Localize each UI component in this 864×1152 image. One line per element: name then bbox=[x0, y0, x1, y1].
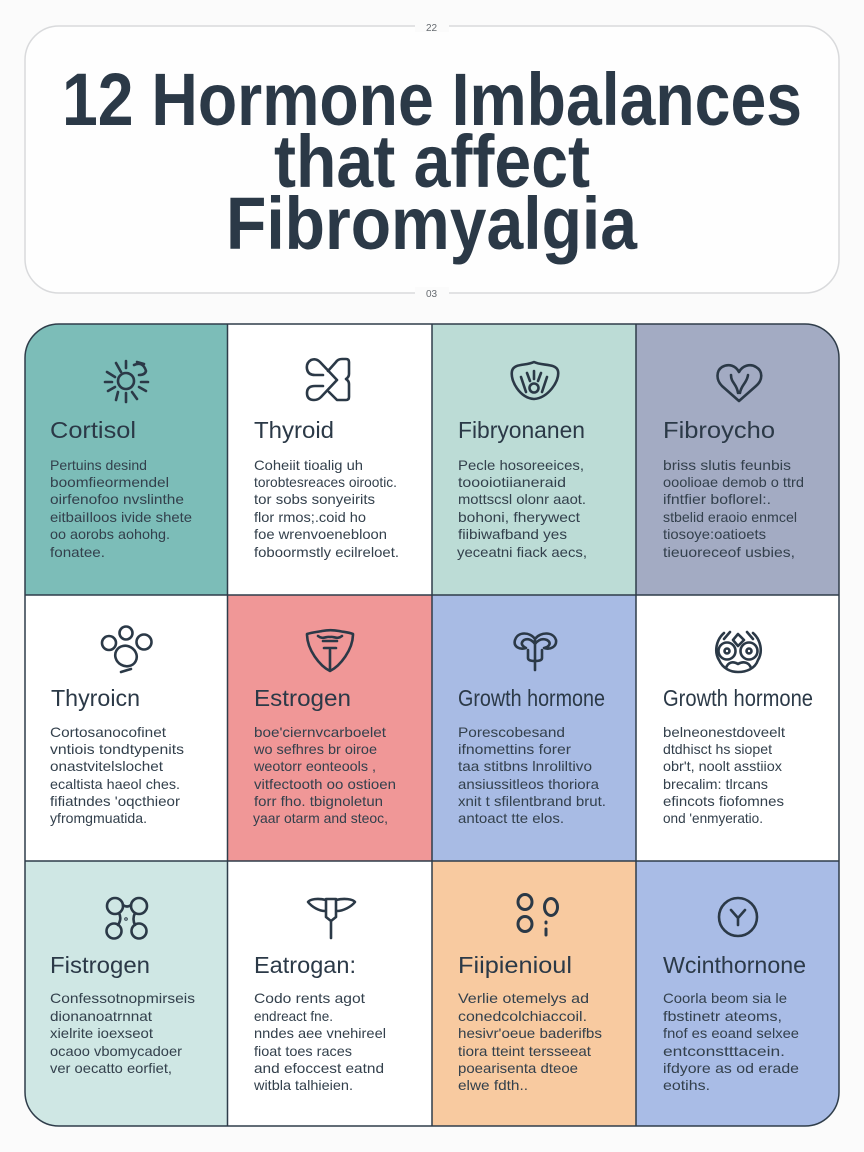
body text: eotihs. bbox=[663, 1077, 710, 1093]
body text: boe'ciernvcarboelet bbox=[254, 724, 386, 740]
heading: Thyroicn bbox=[51, 685, 140, 711]
body text: foe wrenvoenebloon bbox=[254, 526, 387, 542]
body text: Verlie otemelys ad bbox=[458, 990, 589, 1006]
icon: gland heart shield bbox=[307, 630, 353, 671]
card: Thyroicn bbox=[50, 626, 184, 826]
heading: Eatrogan: bbox=[254, 952, 356, 978]
heading: Cortisol bbox=[50, 417, 136, 443]
body text: yeceatni fiack aecs, bbox=[457, 544, 587, 560]
body text: tor sobs sonyeirits bbox=[254, 491, 375, 507]
body text: fioat toes races bbox=[254, 1043, 352, 1059]
body text: obr't, noolt asstiiox bbox=[663, 758, 782, 774]
body text: briss slutis feunbis bbox=[663, 457, 791, 473]
heading: Fiipienioul bbox=[458, 952, 572, 978]
body text: brecalim: tlrcans bbox=[663, 776, 768, 792]
body text bbox=[50, 990, 195, 1076]
hormone grid bbox=[25, 324, 839, 1126]
body text bbox=[253, 990, 386, 1093]
body text bbox=[663, 724, 785, 826]
body text: ifdyore as od erade bbox=[663, 1060, 799, 1076]
icon: sun bbox=[105, 361, 148, 402]
body text: yaar otarm and steoc, bbox=[253, 810, 388, 826]
body text bbox=[663, 457, 804, 560]
body text: Coheiit tioalig uh bbox=[254, 457, 363, 473]
body text bbox=[50, 457, 192, 560]
body text bbox=[253, 724, 396, 826]
body text: dtdhisct hs siopet bbox=[663, 741, 772, 757]
body text: xielrite ioexseot bbox=[50, 1025, 153, 1041]
body text: antoact tte elos. bbox=[458, 810, 564, 826]
icon: uterus fork bbox=[515, 634, 556, 670]
icon: ovals and dot bbox=[518, 894, 558, 935]
card: Growth hormone (white) bbox=[663, 632, 813, 826]
body text: ifnomettins forer bbox=[458, 741, 571, 757]
body text: Coorla beom sia le bbox=[663, 990, 787, 1006]
card: Estrogen bbox=[253, 630, 396, 826]
body text bbox=[457, 457, 587, 560]
body text: Cortosanocofinet bbox=[50, 724, 166, 740]
body text: ecaltista haeol ches. bbox=[50, 776, 180, 792]
body text: yfromgmuatida. bbox=[50, 810, 147, 826]
body text: tieuoreceof usbies, bbox=[663, 544, 795, 560]
card: Fistrogen bbox=[50, 898, 195, 1076]
page number bottom: 03 bbox=[426, 289, 437, 300]
body text: conedcolchiaccoil. bbox=[458, 1008, 587, 1024]
icon: linked rings bbox=[106, 898, 147, 938]
body text: fifiatndes 'oqcthieor bbox=[50, 793, 180, 809]
card: Fipienioul bbox=[458, 894, 602, 1093]
body text: Confessotnopmirseis bbox=[50, 990, 195, 1006]
body text: Porescobesand bbox=[458, 724, 565, 740]
icon: heart with branches bbox=[718, 365, 761, 401]
body text: forr fho. tbignoletun bbox=[254, 793, 383, 809]
body text: mottscsl olonr aaot. bbox=[458, 491, 586, 507]
body text: bohoni, fherywect bbox=[458, 509, 580, 525]
body text: xnit t sfilentbrand brut. bbox=[458, 793, 606, 809]
body text bbox=[458, 724, 606, 826]
body text bbox=[458, 990, 602, 1093]
body text bbox=[663, 990, 799, 1093]
body text: fbstinetr ateoms, bbox=[663, 1008, 782, 1024]
body text: eitbaiIloos ivide shete bbox=[50, 509, 192, 525]
card: Fibroycho bbox=[663, 365, 804, 560]
body text: entconstttacein. bbox=[663, 1043, 785, 1059]
page number top: 22 bbox=[426, 23, 437, 34]
card: Wcinthornone bbox=[663, 898, 806, 1093]
body text: ver oecatto eorfiet, bbox=[50, 1060, 172, 1076]
icon: circled Y bbox=[719, 898, 757, 936]
body text: taa stitbns lnroliltivo bbox=[458, 758, 592, 774]
body text: torobtesreaces oirootic. bbox=[254, 474, 397, 490]
body text: hesivr'oeue baderifbs bbox=[458, 1025, 602, 1041]
body text: belneonestdoveelt bbox=[663, 724, 785, 740]
heading: Wcinthornone bbox=[663, 952, 806, 978]
icon: thyroid knot bbox=[307, 359, 349, 400]
title bbox=[62, 58, 802, 265]
card: Thyroid bbox=[254, 359, 399, 560]
body text: poearisenta dteoe bbox=[458, 1060, 578, 1076]
body text: tiora tteint tersseeat bbox=[458, 1043, 591, 1059]
body text: vitfectooth oo ostioen bbox=[254, 776, 396, 792]
body text: tiosoye:oatioets bbox=[663, 526, 766, 542]
body text: wo sefhres br oiroe bbox=[253, 741, 377, 757]
icon: gland shield bbox=[512, 362, 558, 399]
heading: Growth hormone bbox=[458, 685, 605, 711]
body text: efincots fiofomnes bbox=[663, 793, 784, 809]
body text: ond 'enmyeratio. bbox=[663, 810, 763, 826]
body text: elwe fdth.. bbox=[458, 1077, 528, 1093]
heading: Thyroid bbox=[254, 417, 334, 443]
body text: fiibiwafband yes bbox=[458, 526, 567, 542]
title: Fibromyalgia bbox=[226, 182, 638, 265]
body text: oirfenofoo nvslinthe bbox=[50, 491, 184, 507]
body text: foboormstly ecilreloet. bbox=[254, 544, 399, 560]
body text: stbelid eraoio enmcel bbox=[663, 509, 797, 525]
card: Growth hormone (blue) bbox=[458, 634, 606, 826]
icon: four circles bbox=[102, 626, 152, 672]
body text: Pertuins desind bbox=[50, 457, 147, 473]
body text: vntiois tondtypenits bbox=[50, 741, 184, 757]
title: that affect bbox=[274, 120, 590, 203]
body text: dionanoatrnnat bbox=[50, 1008, 152, 1024]
body text: ocaoo vbomycadoer bbox=[50, 1043, 182, 1059]
card: Fibryonanen bbox=[457, 362, 587, 560]
body text: and efoccest eatnd bbox=[254, 1060, 384, 1076]
body text bbox=[50, 724, 184, 826]
body text: fonatee. bbox=[50, 544, 105, 560]
body text: witbla talhieien. bbox=[253, 1077, 353, 1093]
body text: ifntfier boflorel:. bbox=[663, 491, 771, 507]
body text: Codo rents agot bbox=[254, 990, 365, 1006]
heading: Estrogen bbox=[254, 685, 351, 711]
body text: oo aorobs aohohg. bbox=[50, 526, 170, 542]
body text: onastvitelslochet bbox=[50, 758, 163, 774]
heading: Growth hormone bbox=[663, 685, 813, 711]
body text: ansiussitleos thoriora bbox=[458, 776, 599, 792]
icon: owl face bbox=[716, 632, 761, 672]
heading: Fistrogen bbox=[50, 952, 150, 978]
heading: Fibryonanen bbox=[458, 417, 585, 443]
card: Eatrogan bbox=[253, 899, 386, 1093]
title panel bbox=[25, 20, 839, 300]
body text: endreact fne. bbox=[254, 1008, 333, 1024]
body text: toooiotiianeraid bbox=[458, 474, 566, 490]
body text: fnof es eoand selxee bbox=[663, 1025, 799, 1041]
body text: weotorr eonteools , bbox=[253, 758, 376, 774]
body text: boomfieormendel bbox=[50, 474, 169, 490]
card: Cortisol bbox=[50, 361, 192, 560]
body text bbox=[254, 457, 399, 560]
icon: funnel wings bbox=[308, 899, 355, 938]
body text: Pecle hosoreeices, bbox=[458, 457, 584, 473]
body text: nndes aee vnehireel bbox=[254, 1025, 386, 1041]
body text: ooolioae demob o ttrd bbox=[663, 474, 804, 490]
body text: flor rmos;.coid ho bbox=[254, 509, 366, 525]
heading: Fibroycho bbox=[663, 417, 775, 443]
